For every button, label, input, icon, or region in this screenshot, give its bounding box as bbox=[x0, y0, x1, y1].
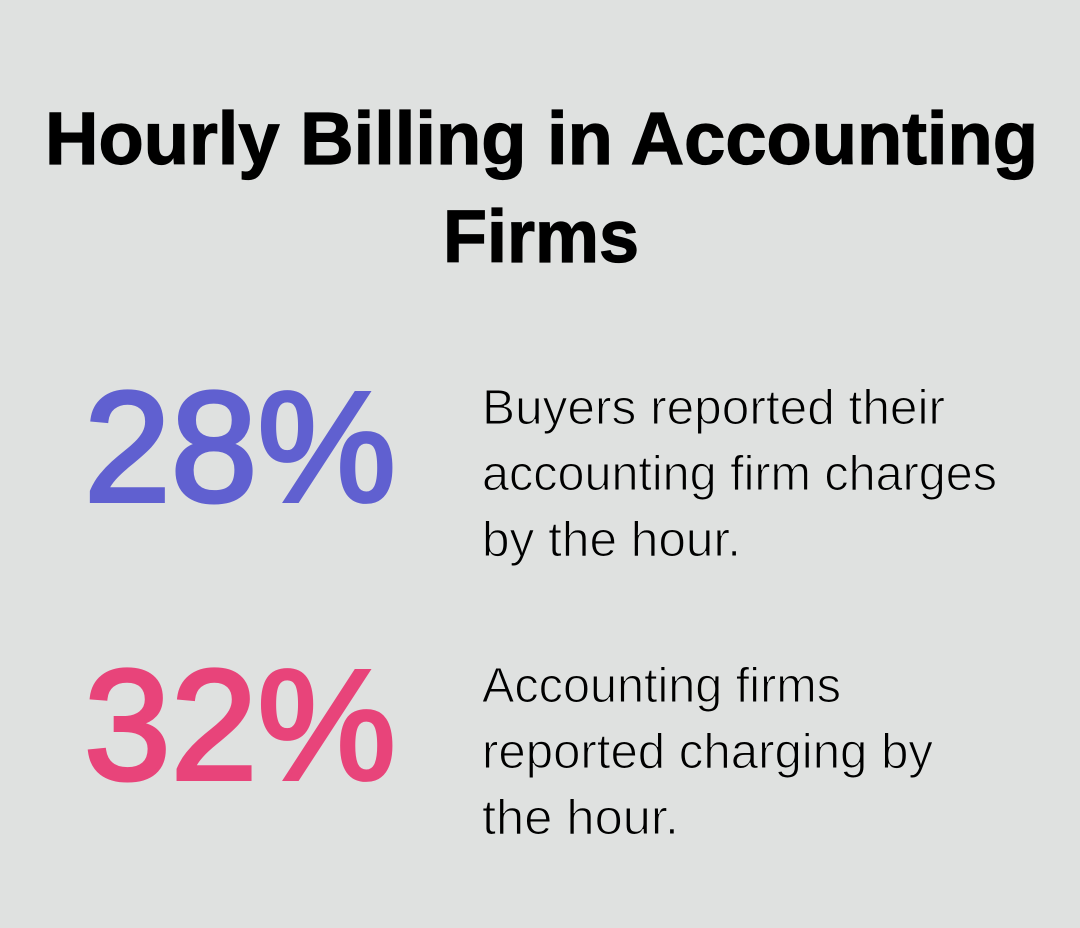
stat description: firms: the hour. bbox=[482, 791, 679, 845]
stat description: buyers: by the hour. bbox=[482, 513, 741, 567]
stat number: 28%: 28% bbox=[84, 360, 396, 535]
stat: 28% buyers bbox=[84, 360, 997, 567]
stat description: buyers: Buyers reported their bbox=[482, 381, 945, 435]
stat description: firms bbox=[482, 659, 933, 845]
stat description: buyers: accounting firm charges bbox=[482, 447, 997, 501]
stat description: firms: reported charging by bbox=[482, 725, 933, 779]
title: Firms bbox=[443, 195, 639, 278]
title: Hourly Billing in Accounting bbox=[45, 97, 1038, 180]
stat: 32% firms bbox=[84, 638, 933, 845]
stat description: buyers bbox=[482, 381, 997, 567]
stat description: firms: Accounting firms bbox=[482, 659, 841, 713]
stat number: 32%: 32% bbox=[84, 638, 396, 813]
title bbox=[45, 97, 1038, 278]
